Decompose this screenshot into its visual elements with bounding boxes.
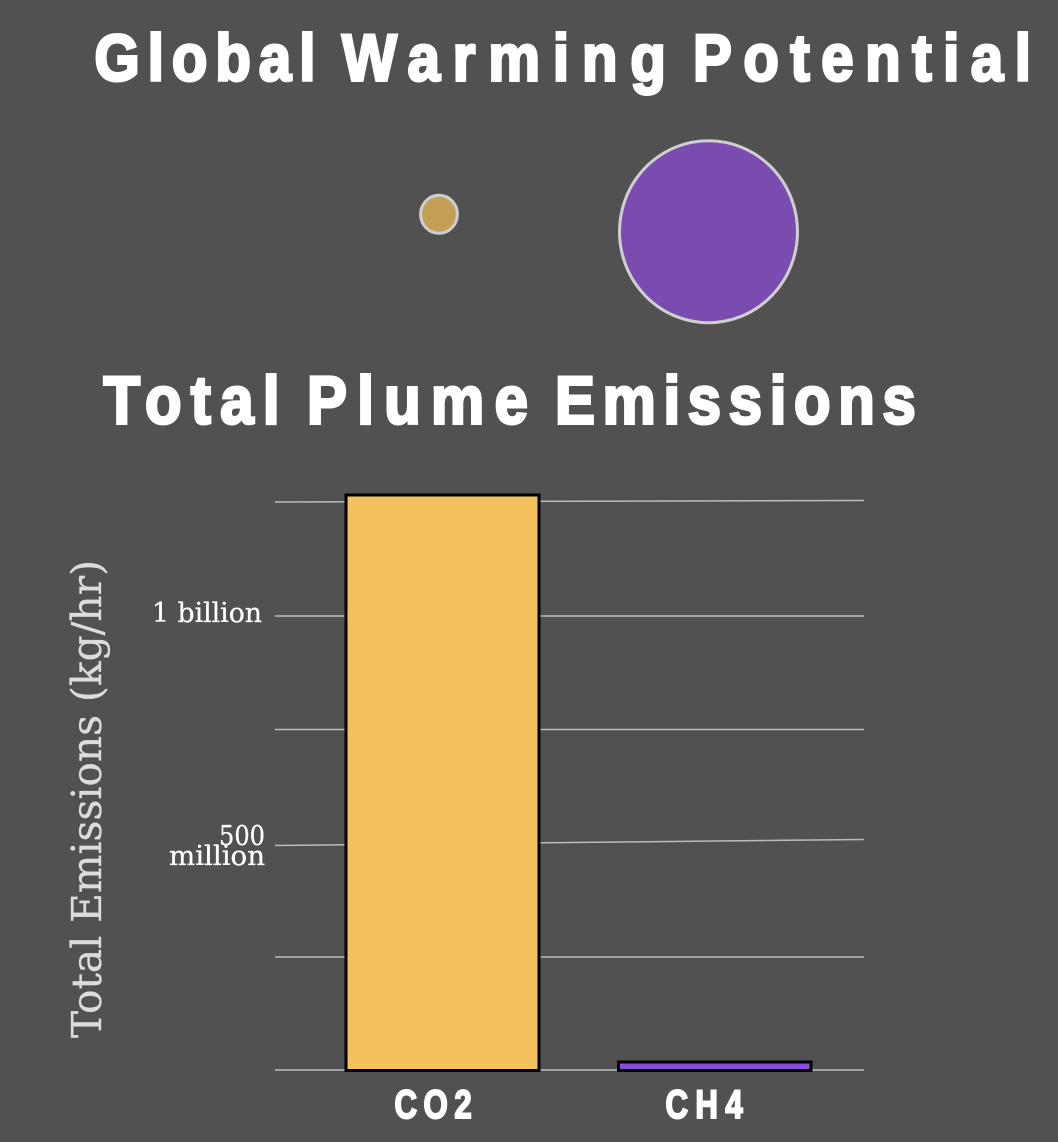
y tick label: 1 billion: 1 billion bbox=[152, 598, 262, 629]
circle: CO2 global warming potential bbox=[421, 195, 457, 233]
title: Total Plume Emissions: Plume bbox=[307, 362, 528, 438]
x label: CO2: CO2 bbox=[394, 1082, 472, 1127]
title: Global Warming Potential: Warming bbox=[342, 22, 666, 95]
y axis title: Total Emissions (kg/hr) bbox=[63, 560, 111, 1038]
title: Total Plume Emissions: Total bbox=[104, 362, 279, 438]
y tick label: 500 million: 500 bbox=[219, 821, 265, 852]
title: Global Warming Potential bbox=[94, 22, 1031, 95]
title: Total Plume Emissions bbox=[104, 362, 916, 438]
title: Total Plume Emissions: Emissions bbox=[555, 362, 916, 438]
bar: CH4 bbox=[618, 1062, 811, 1070]
circle: CH4 global warming potential bbox=[620, 141, 798, 323]
bar: CO2 bbox=[346, 495, 539, 1070]
title: Global Warming Potential: Potential bbox=[693, 22, 1031, 95]
bar chart: total emissions bbox=[63, 495, 864, 1127]
y tick label: 500 million: million bbox=[169, 841, 265, 872]
x label: CH4: CH4 bbox=[666, 1082, 743, 1127]
y tick label: 500 million bbox=[169, 821, 265, 872]
title: Global Warming Potential: Global bbox=[94, 22, 315, 95]
